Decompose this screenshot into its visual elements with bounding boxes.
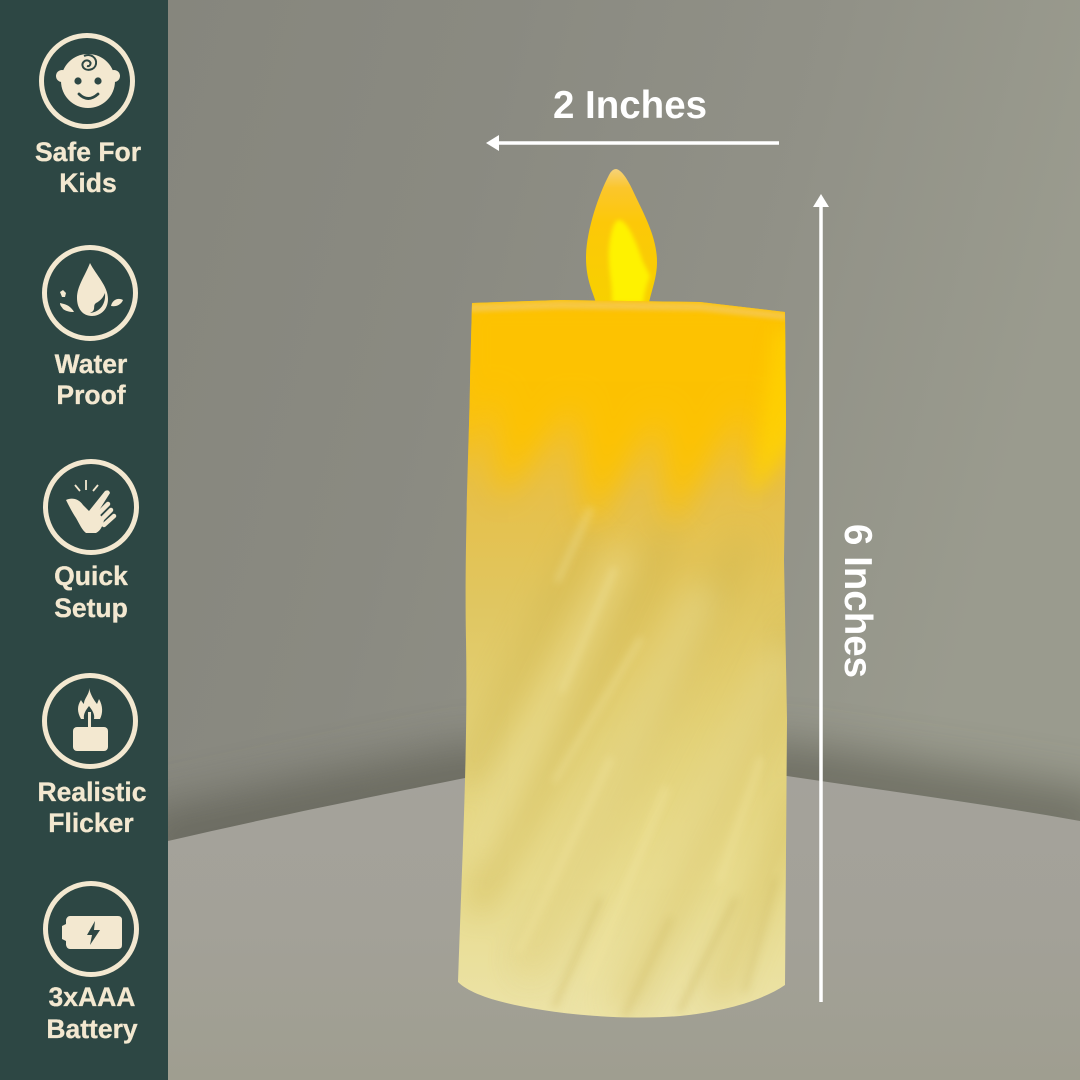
candle flame [586,169,657,303]
photo background: table surface [168,776,1080,1080]
candle [450,169,800,1025]
thin highlights [554,506,761,820]
label: Realistic Flicker: Realistic [37,777,147,807]
feature: Water Proof [44,248,136,410]
glowing yellow upper tongues [468,300,786,530]
feature: Quick Setup [46,462,136,623]
icon: water drop [44,248,136,338]
label: Quick Setup: Quick [54,561,128,591]
dimension: width arrow [486,135,779,151]
icon: snapping hand [46,462,136,552]
icon: candle with flame [44,676,136,766]
thin grooves [552,900,765,1015]
label: 3xAAA Battery: 3xAAA [49,982,135,1012]
label: Water Proof: Proof [56,380,126,410]
label: Safe For Kids: Kids [59,168,117,198]
label: 3xAAA Battery: Battery [46,1014,138,1044]
dimension: height arrow [813,194,829,1002]
feature: 3xAAA Battery [46,884,138,1044]
icon: baby face [42,36,132,126]
feature: Realistic Flicker [37,676,147,838]
dimension label: 2 Inches: 2 Inches [553,84,707,127]
wide soft shaded bands [462,647,786,1016]
label: Quick Setup: Setup [54,593,128,623]
feature: Safe For Kids [35,36,141,198]
candle top rim [470,301,786,320]
photo background: wall [140,0,1080,860]
label: Safe For Kids: Safe For [35,137,141,167]
label: Realistic Flicker: Flicker [48,808,134,838]
pale wide bands [482,546,786,954]
candle body [450,290,800,1025]
dimension label: 6 Inches: 6 Inches [836,524,879,678]
icon: battery [46,884,136,974]
sidebar panel [0,0,168,1080]
label: Water Proof: Water [55,349,127,379]
